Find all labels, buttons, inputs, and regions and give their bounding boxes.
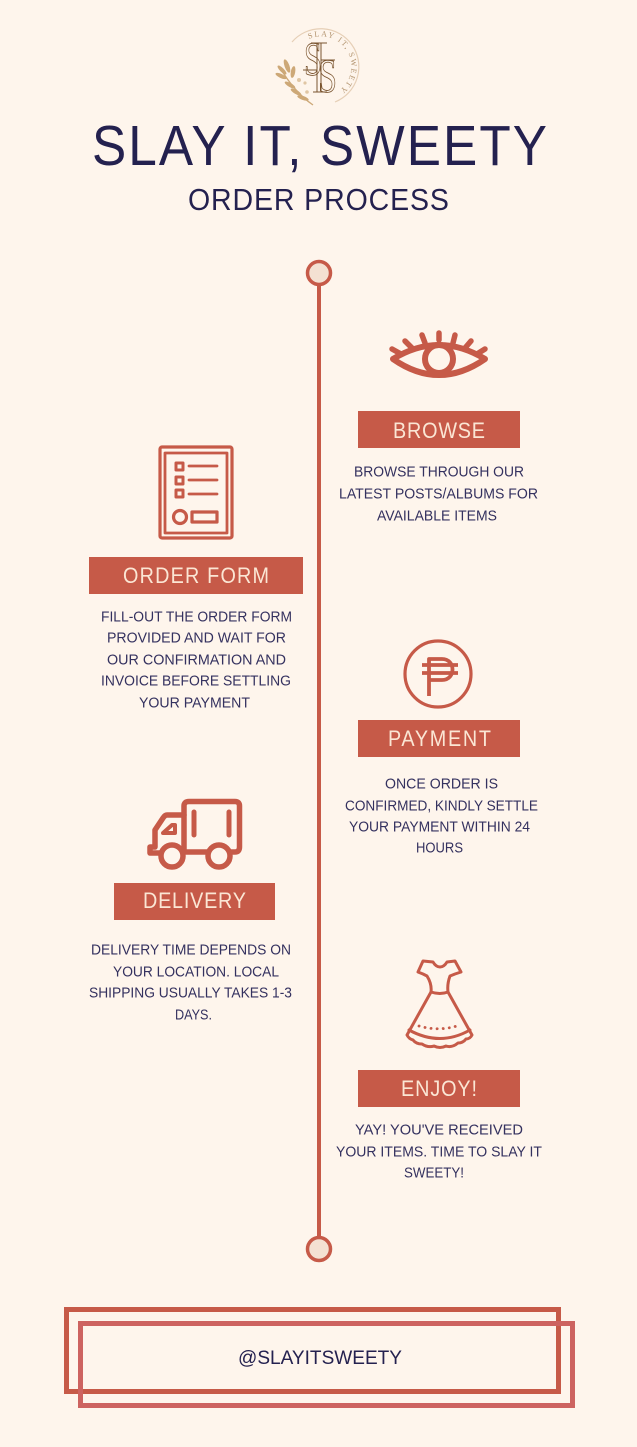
text: payment xyxy=(345,776,538,856)
text: browse: BROWSE THROUGH OUR xyxy=(354,464,524,480)
logo: SLAY IT, SWEETY xyxy=(308,31,357,94)
icon: dress xyxy=(407,961,472,1048)
logo: S xyxy=(304,33,322,86)
heading: order form xyxy=(89,557,303,594)
text: delivery: DAYS. xyxy=(175,1006,212,1024)
icon: eye xyxy=(392,333,485,375)
text: delivery: SHIPPING USUALLY TAKES 1-3 xyxy=(89,984,292,1002)
heading: enjoy xyxy=(358,1070,520,1107)
heading: enjoy: ENJOY! xyxy=(401,1077,477,1101)
panel: enjoy xyxy=(336,961,542,1182)
heading: payment xyxy=(358,720,520,757)
icon: order form xyxy=(160,447,232,538)
text: enjoy xyxy=(336,1122,542,1182)
logo: S xyxy=(318,50,337,103)
icon: peso coin xyxy=(405,641,471,707)
heading: browse xyxy=(358,411,520,448)
timeline xyxy=(308,262,330,1260)
text: enjoy: YOUR ITEMS. TIME TO SLAY IT xyxy=(336,1144,542,1160)
text: order form: INVOICE BEFORE SETTLING xyxy=(101,672,291,690)
icon: delivery truck xyxy=(150,802,240,867)
text: payment: YOUR PAYMENT WITHIN 24 xyxy=(349,818,530,836)
footer frame xyxy=(66,1310,572,1406)
panel: order form xyxy=(89,447,303,712)
heading: delivery xyxy=(114,883,275,920)
panel: delivery xyxy=(89,802,292,1024)
heading: order form: ORDER FORM xyxy=(123,564,269,588)
title: SLAY IT, SWEETY xyxy=(92,115,547,178)
text: browse: AVAILABLE ITEMS xyxy=(377,508,497,524)
text: order form: OUR CONFIRMATION AND xyxy=(107,652,286,668)
subtitle: ORDER PROCESS xyxy=(188,183,449,217)
text: browse: LATEST POSTS/ALBUMS FOR xyxy=(339,486,538,502)
text: order form xyxy=(101,608,292,712)
text: delivery: DELIVERY TIME DEPENDS ON xyxy=(91,942,291,958)
text: order form: FILL-OUT THE ORDER FORM xyxy=(101,608,292,626)
text: browse xyxy=(339,464,538,524)
heading: payment: PAYMENT xyxy=(388,727,491,751)
panel: browse xyxy=(339,333,538,524)
text: payment: HOURS xyxy=(416,840,463,856)
text: delivery xyxy=(89,942,292,1024)
logo xyxy=(276,28,360,106)
text: payment: ONCE ORDER IS xyxy=(385,776,498,792)
text: order form: YOUR PAYMENT xyxy=(139,694,250,712)
handle: @SLAYITSWEETY xyxy=(238,1348,402,1369)
text: delivery: YOUR LOCATION. LOCAL xyxy=(113,964,279,980)
heading: browse: BROWSE xyxy=(393,419,485,443)
heading: delivery: DELIVERY xyxy=(143,889,246,913)
text: payment: CONFIRMED, KINDLY SETTLE xyxy=(345,798,538,814)
text: enjoy: SWEETY! xyxy=(404,1164,464,1182)
text: order form: PROVIDED AND WAIT FOR xyxy=(107,630,286,646)
panel: payment xyxy=(345,641,538,856)
text: enjoy: YAY! YOU'VE RECEIVED xyxy=(355,1122,523,1138)
